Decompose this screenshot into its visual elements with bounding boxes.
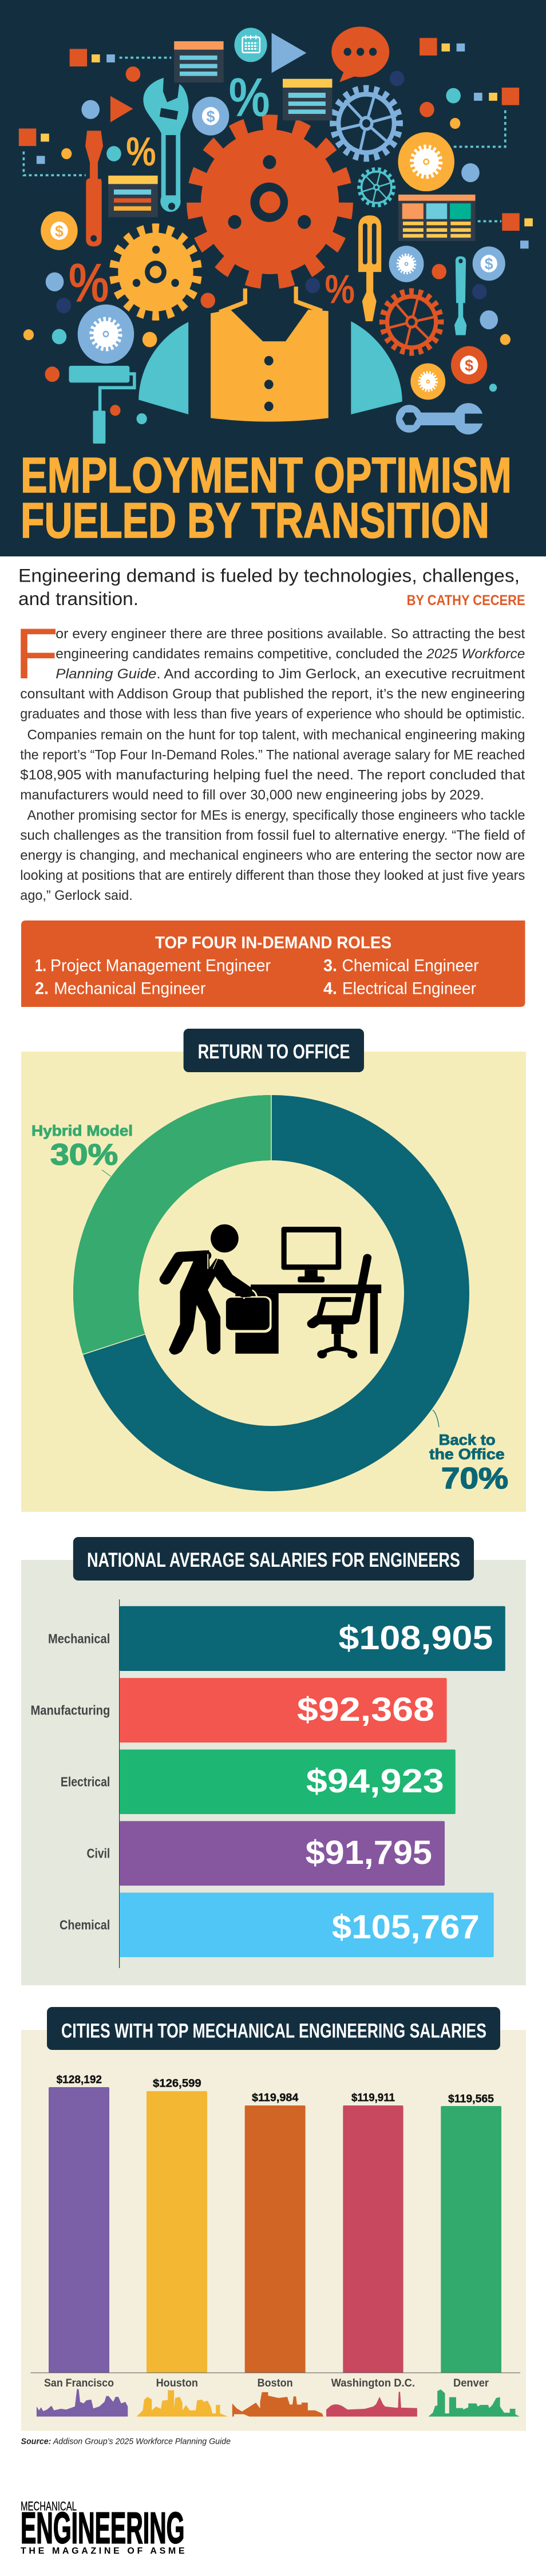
icon: percent signs: % — [229, 66, 270, 128]
logo: Mechanical Engineering: THE MAGAZINE OF ASME — [21, 2546, 185, 2556]
bar: chemical: $105,767 — [332, 1909, 480, 1946]
roles list: 4. — [323, 979, 337, 998]
bar: Boston — [245, 2092, 306, 2389]
icon: worker leaving desk — [165, 1224, 381, 1358]
article body — [15, 614, 525, 903]
article body: Companies remain on the hunt for top talent, with mechanical engineering making — [27, 728, 525, 743]
label: back to the office: 70% — [441, 1462, 508, 1495]
bar: electrical: $94,923 — [306, 1763, 444, 1800]
logo: Mechanical Engineering: MECHANICAL — [21, 2499, 77, 2513]
icon: percent signs: % — [69, 252, 109, 313]
roles list: 3. — [323, 956, 337, 975]
label: back to the office: the Office — [429, 1445, 505, 1463]
panel: return to office — [21, 1029, 526, 1512]
icon: dollar badges — [41, 97, 505, 384]
bar: electrical — [61, 1749, 456, 1814]
icon: red outline gear — [382, 291, 441, 353]
panel: cities with top salaries — [21, 2007, 526, 2431]
icon: teal screwdriver — [454, 256, 466, 335]
bar: Boston: Boston — [258, 2377, 293, 2389]
logo: Mechanical Engineering: ENGINEERING — [21, 2504, 184, 2553]
icon: small teal outline gear — [359, 169, 394, 206]
icon: connector squares and dotted lines — [19, 38, 533, 248]
roles list — [35, 956, 479, 998]
roles heading: TOP FOUR IN-DEMAND ROLES — [155, 934, 391, 953]
roles list: Electrical Engineer — [342, 979, 476, 998]
icon: play triangles — [110, 33, 306, 123]
roles list: Mechanical Engineer — [54, 979, 205, 998]
bar: Houston: $126,599 — [153, 2078, 201, 2089]
panel: hero illustration — [0, 0, 546, 556]
bar: San Francisco: $128,192 — [57, 2074, 102, 2086]
icon: main orange gear — [195, 123, 345, 280]
article body: energy is changing, and mechanical engineers who are entering the sector now are — [20, 848, 525, 863]
icon: blue outline gear — [333, 89, 399, 158]
article body: engineering candidates remains competitive, concluded the 2025 Workforce — [56, 646, 525, 662]
heading: national average salaries — [73, 1537, 474, 1581]
bar: Houston: Houston — [156, 2377, 198, 2389]
bar: Washington D.C.: Washington D.C. — [331, 2377, 415, 2389]
bar: manufacturing: Manufacturing — [31, 1703, 110, 1718]
icon: teal wrench — [143, 78, 188, 212]
bar: Houston — [147, 2078, 207, 2389]
icon: percent signs: % — [325, 267, 355, 312]
icon: engineer figure — [139, 287, 402, 422]
label: hybrid model: 30% — [50, 1139, 118, 1172]
bar: chemical: Chemical — [60, 1918, 110, 1933]
article body: manufacturers would need to fill over 30,000 new engineering jobs by 2029. — [20, 788, 484, 803]
bar: civil — [87, 1821, 445, 1886]
icon: yellow screwdriver — [358, 215, 381, 321]
bar: civil: $91,795 — [306, 1834, 432, 1871]
bar chart: city salaries — [31, 2074, 520, 2389]
heading: return to office: RETURN TO OFFICE — [198, 1041, 350, 1063]
byline: BY CATHY CECERE — [407, 592, 525, 609]
article body: or every engineer there are three positions available. So attracting the best — [56, 626, 525, 642]
bar: mechanical: Mechanical — [48, 1631, 110, 1646]
bar: civil: Civil — [87, 1846, 110, 1861]
panel: top four in-demand roles — [21, 920, 525, 1007]
subtitle — [18, 566, 520, 609]
source note: Source: Addison Group’s 2025 Workforce Planning Guide — [21, 2437, 231, 2447]
icon: percent signs — [69, 66, 355, 313]
label: back to the office: Back to — [439, 1431, 496, 1448]
subtitle: Engineering demand is fueled by technologies, challenges, — [18, 566, 520, 586]
subtitle: and transition. — [18, 588, 139, 609]
article body: ago,” Gerlock said. — [20, 888, 133, 903]
icon: dollar badges: $ — [207, 107, 215, 125]
bar: Denver: $119,565 — [448, 2093, 494, 2105]
article body: such challenges as the transition from fossil fuel to alternative energy. “The field of — [20, 828, 525, 843]
bar: mechanical — [48, 1606, 505, 1671]
roles list: 1. — [35, 956, 46, 975]
icon: yellow gear — [114, 228, 197, 316]
article body: Planning Guide . And according to Jim Gerlock, an executive recruitment — [56, 666, 525, 682]
bar: Boston: $119,984 — [252, 2092, 299, 2104]
article body: looking at positions that are entirely different than those they looked at just five years — [20, 868, 525, 883]
bar: Denver — [441, 2093, 501, 2389]
roles list: Chemical Engineer — [342, 956, 479, 975]
bar: San Francisco — [44, 2074, 114, 2389]
donut chart — [73, 1095, 437, 1459]
icon: chat bubble — [331, 27, 389, 82]
icon: city skylines — [37, 2389, 520, 2416]
icon: percent signs: % — [126, 129, 156, 174]
bar: San Francisco: San Francisco — [44, 2377, 114, 2389]
icon: blue wrench — [396, 403, 484, 434]
icon: gear badges — [78, 132, 454, 400]
bar chart: salaries by discipline — [31, 1599, 505, 1968]
article body: Another promising sector for MEs is energy, specifically those engineers who tackle — [27, 808, 525, 823]
heading: cities with top salaries — [47, 2007, 500, 2050]
roles list: Project Management Engineer — [50, 956, 271, 975]
article body: consultant with Addison Group that published the report, it’s the new engineering — [20, 686, 525, 702]
bar: Washington D.C. — [331, 2092, 415, 2389]
heading: return to office — [184, 1029, 364, 1072]
roles list: 2. — [35, 979, 49, 998]
icon: dollar badges: $ — [485, 255, 493, 273]
bar: Washington D.C.: $119,911 — [351, 2092, 395, 2104]
article body: $108,905 with manufacturing helping fuel the need. The report concluded that — [20, 768, 525, 783]
icon: paint roller — [69, 366, 134, 444]
label: hybrid model: Hybrid Model — [31, 1122, 133, 1139]
icon: scattered dots — [23, 66, 511, 424]
bar: manufacturing — [31, 1678, 447, 1743]
label: back to the office — [429, 1410, 508, 1495]
label: hybrid model — [31, 1122, 133, 1176]
panel: national average salaries — [21, 1537, 526, 1985]
bar: Denver: Denver — [453, 2377, 489, 2389]
icon: dollar badges: $ — [465, 356, 473, 374]
bar: electrical: Electrical — [61, 1775, 110, 1789]
logo: Mechanical Engineering — [21, 2499, 185, 2556]
drop cap: F — [15, 614, 58, 694]
icon: dollar badges: $ — [55, 222, 64, 240]
bar: chemical — [60, 1893, 494, 1957]
article body: the report’s “Top Four In-Demand Roles.” The national average salary for ME reached — [20, 748, 525, 763]
bar: mechanical: $108,905 — [338, 1619, 493, 1657]
article body: graduates and those with less than five years of experience who should be optimistic. — [20, 706, 525, 722]
icon: calendar badge — [234, 27, 267, 62]
title — [21, 448, 512, 548]
icon: data windows — [108, 41, 475, 241]
icon: red screwdriver — [85, 131, 103, 246]
bar: manufacturing: $92,368 — [297, 1691, 434, 1728]
